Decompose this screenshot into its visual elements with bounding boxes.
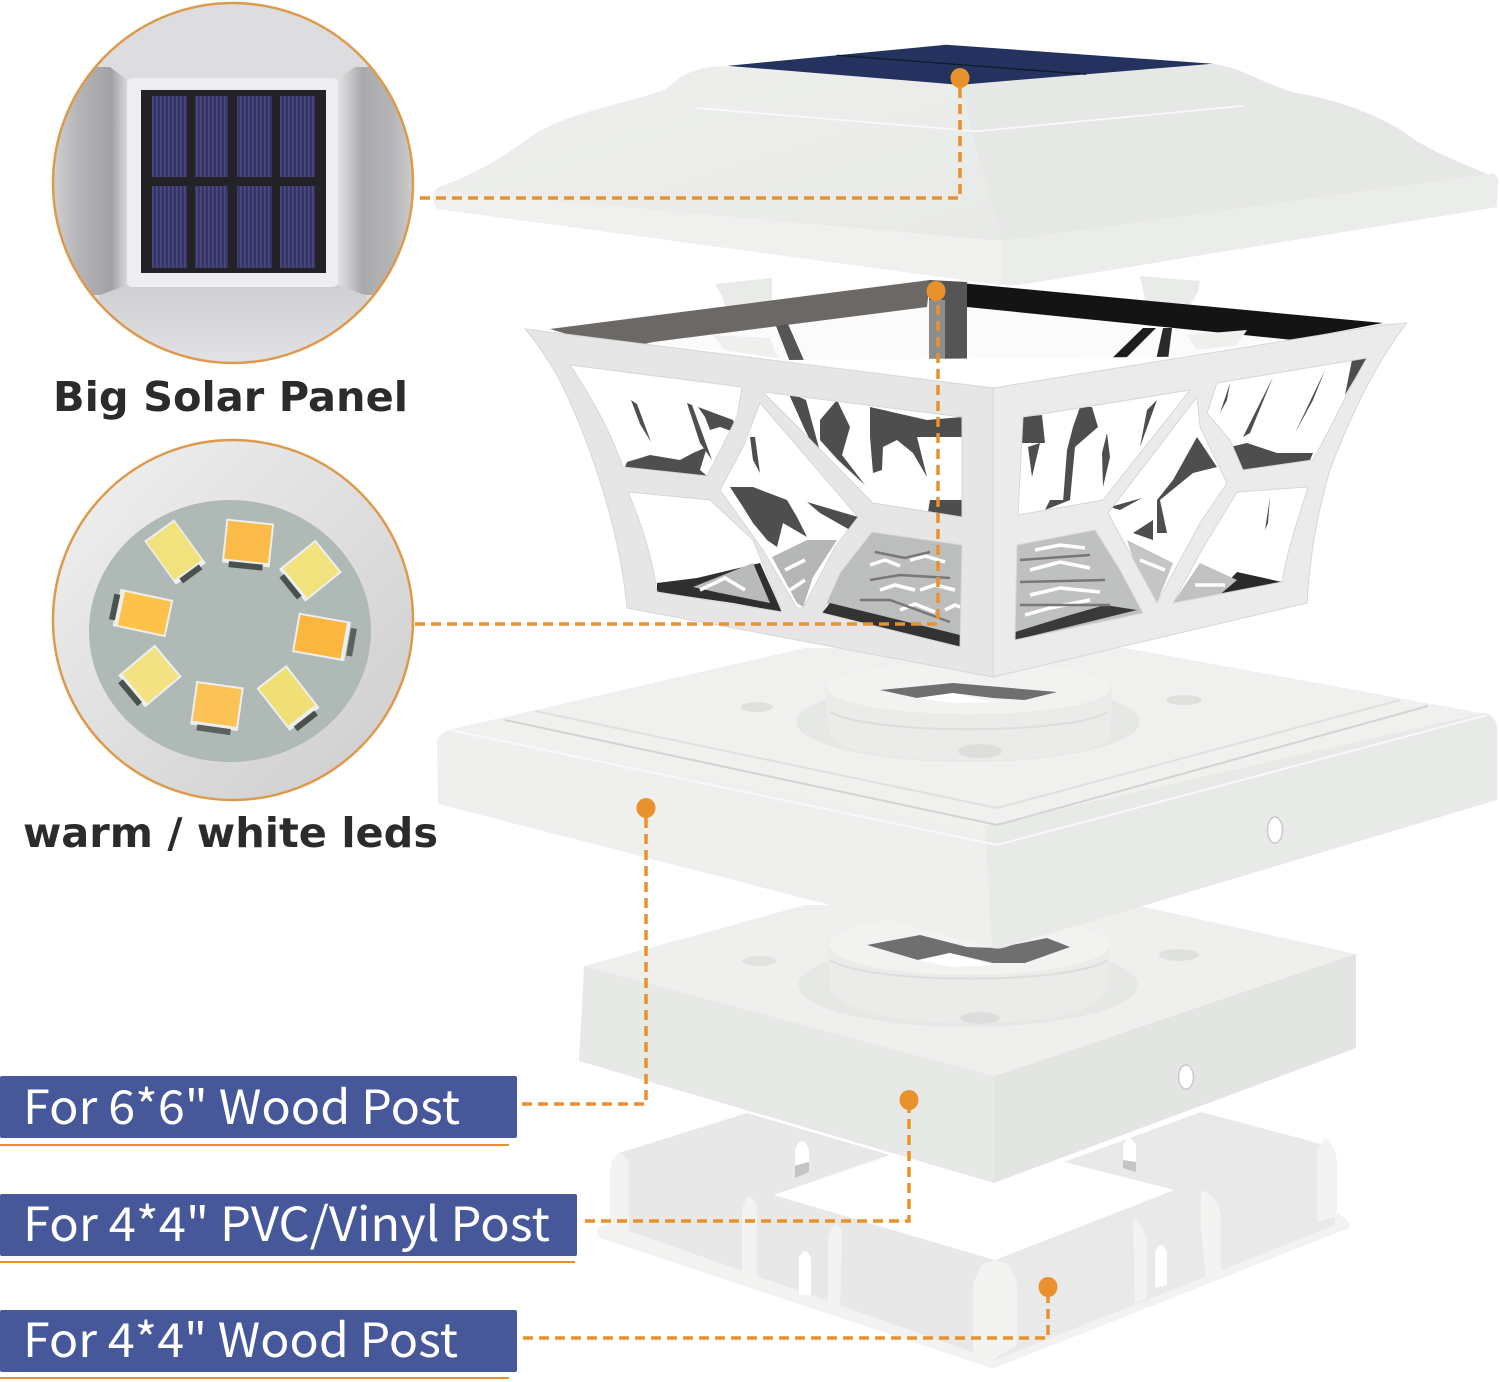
ring collar xyxy=(796,662,1140,762)
lens seen through glass xyxy=(657,563,782,612)
panel: solar panel detail circle xyxy=(50,3,420,370)
clips at front xyxy=(713,330,1247,358)
part: 4x4 PVC/vinyl base xyxy=(579,905,1356,1183)
part: lantern with glass xyxy=(525,276,1407,677)
part: 6x6 wood post base xyxy=(437,648,1497,949)
slots xyxy=(795,1138,1167,1295)
icon: LED white 3 xyxy=(275,540,342,605)
frame: right face xyxy=(993,323,1407,677)
icon: LED warm 2 xyxy=(221,519,274,571)
icon: LED warm 7 xyxy=(189,681,244,736)
callout bar: For 6*6" Wood Post: For 6*6" Wood Post xyxy=(23,1069,460,1138)
icon: solar cells xyxy=(141,90,326,273)
icon: LED white 6 xyxy=(114,644,182,711)
leader: 6x6 wood post xyxy=(522,798,656,1104)
icon: LED warm 4 xyxy=(108,588,173,637)
icon: LED white 1 xyxy=(144,519,208,587)
panel: LED detail circle xyxy=(53,440,413,800)
callout bar: For 4*4" PVC/Vinyl Post: For 4*4" PVC/Vinyl Post xyxy=(23,1186,550,1255)
bevel xyxy=(450,700,1487,845)
part: roof with solar panel xyxy=(433,45,1498,285)
ribs xyxy=(610,1137,1337,1360)
solar surface xyxy=(727,45,1213,85)
clips at back xyxy=(715,276,1200,312)
leader: LEDs xyxy=(415,281,946,624)
part: 4x4 wood post adapter xyxy=(597,1112,1349,1368)
ring collar xyxy=(798,915,1138,1027)
lens facets xyxy=(700,545,1225,615)
icon: LED warm 5 xyxy=(292,613,358,662)
callout bar: For 4*4" Wood Post: For 4*4" Wood Post xyxy=(23,1302,458,1371)
heading: Big Solar Panel: Big Solar Panel xyxy=(53,373,408,421)
leader: 4x4 wood post xyxy=(523,1277,1058,1338)
leader: 4x4 PVC post xyxy=(585,1090,918,1221)
frame: left face xyxy=(525,329,993,677)
leader: solar panel xyxy=(420,68,970,198)
icon: LED white 8 xyxy=(256,665,323,735)
heading: warm / white leds: warm / white leds xyxy=(23,809,438,857)
interior top xyxy=(550,280,1383,387)
glass panes xyxy=(565,355,1370,650)
